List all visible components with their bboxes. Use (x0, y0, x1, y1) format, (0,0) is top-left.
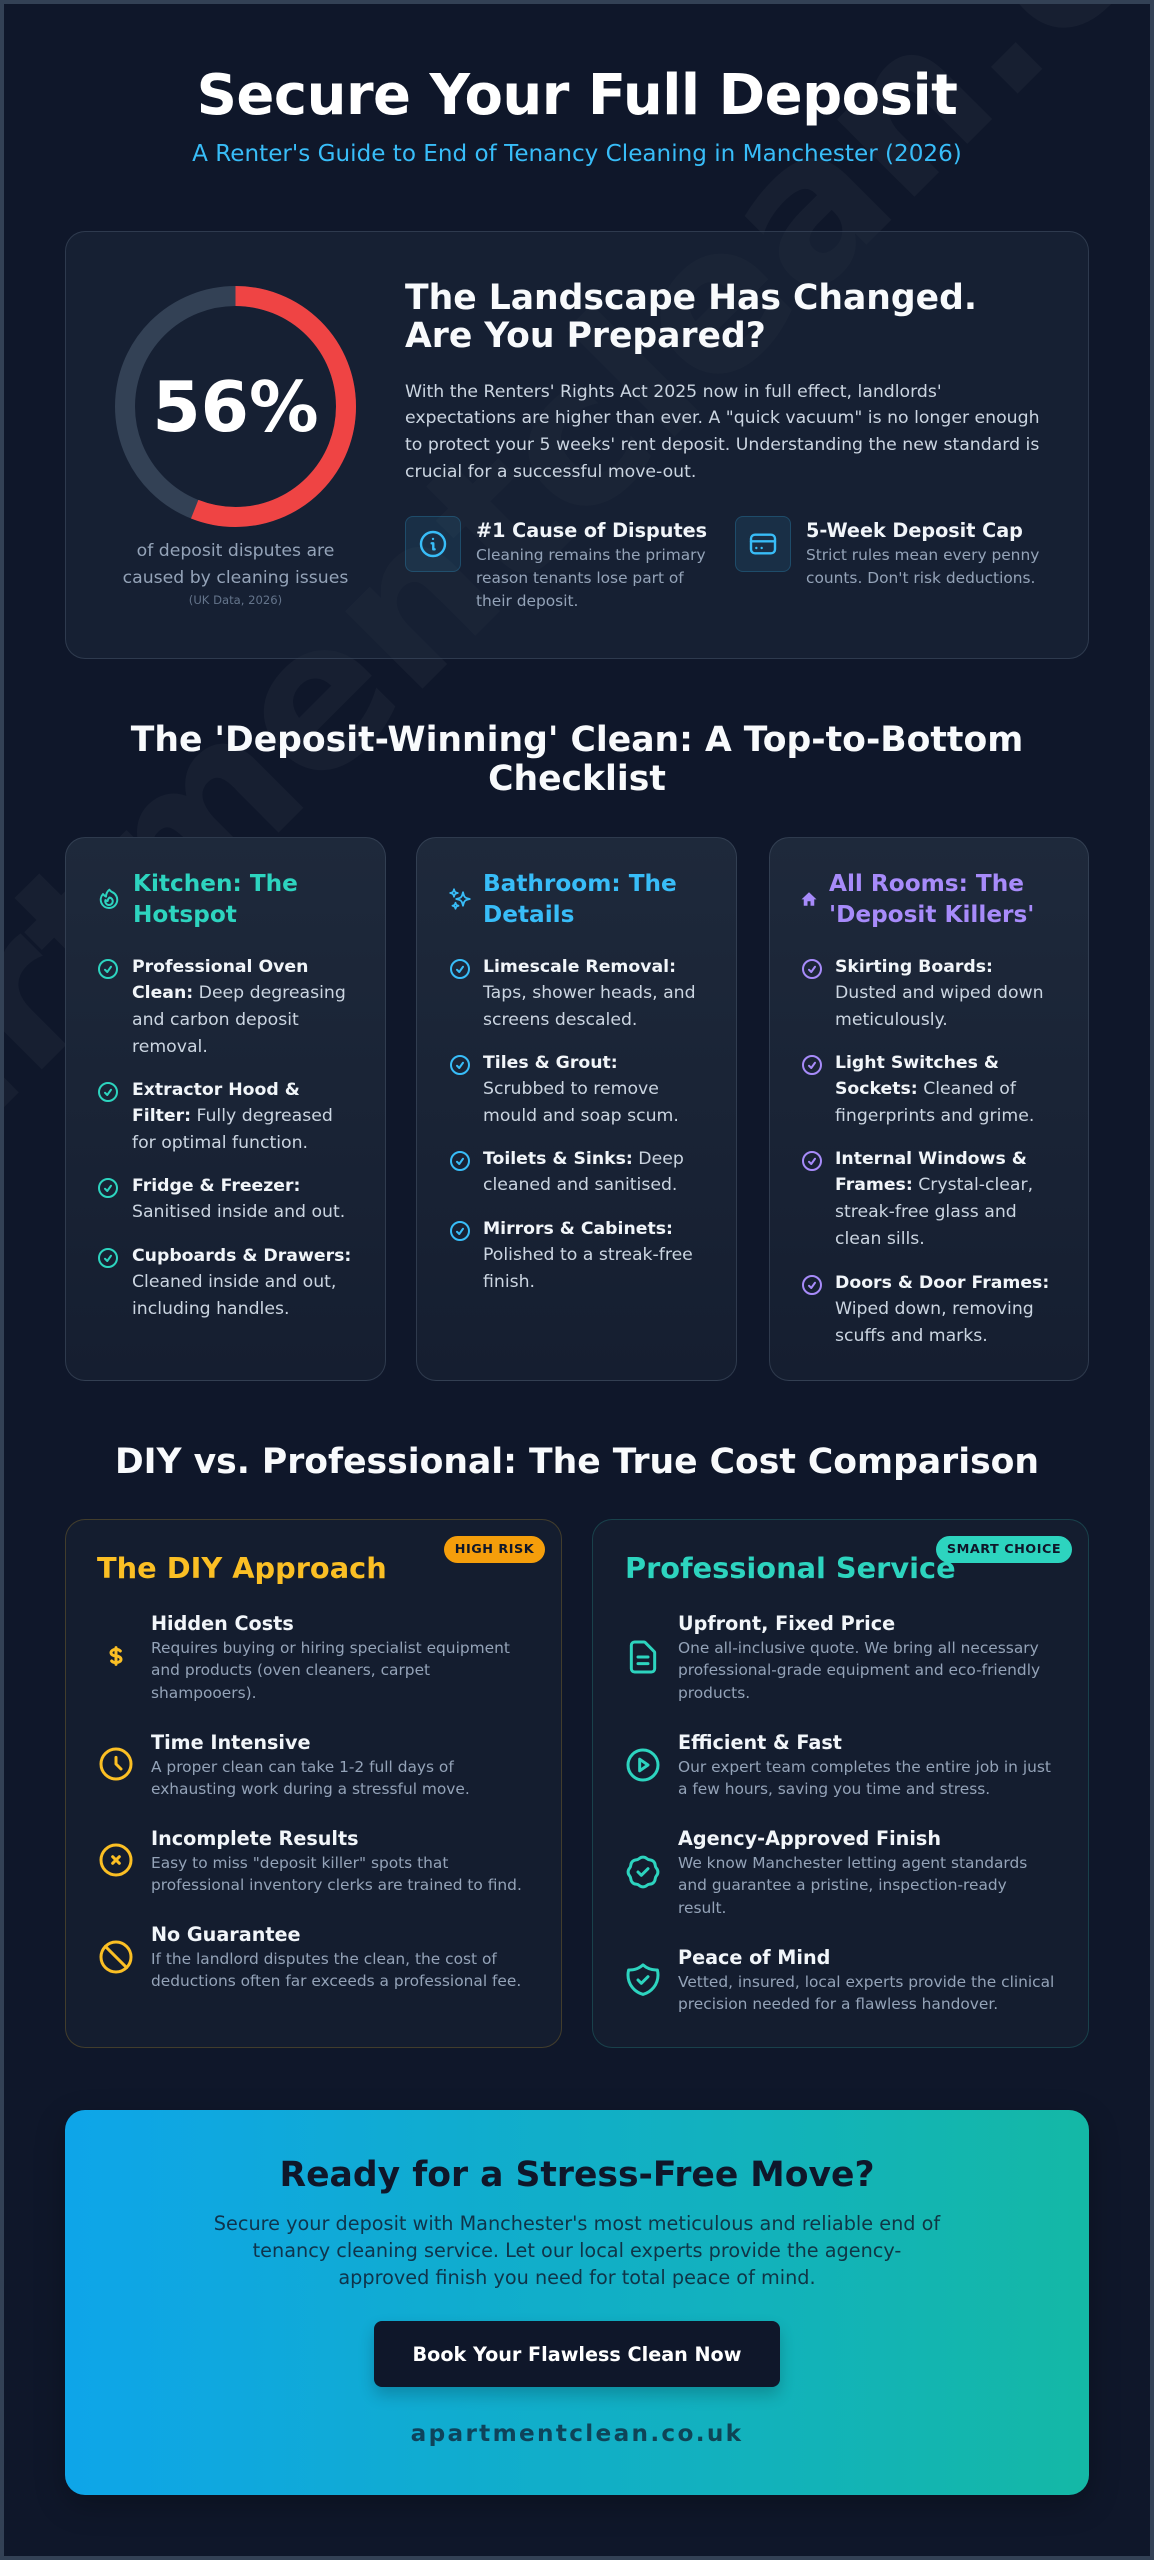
kitchen list: Cleaned inside and out, (132, 1272, 336, 1292)
icon: play (626, 1748, 660, 1782)
CTA paragraph (214, 2212, 940, 2289)
heading: checklist (130, 720, 1023, 798)
fact: 5-week cap (806, 519, 1039, 587)
kitchen list (98, 957, 351, 1319)
item: fixed price: professional-grade equipment and eco-friendly (678, 1661, 1040, 1679)
professional heading: Professional Service (625, 1551, 956, 1585)
item: fixed price: One all-inclusive quote. We bring all necessary (678, 1638, 1039, 1656)
item: hidden costs (151, 1612, 510, 1702)
bathroom list: Polished to a streak-free (483, 1245, 693, 1265)
panel: bathroom (416, 837, 737, 1381)
item: time intensive: exhausting work during a stressful move. (151, 1780, 470, 1798)
heading: landscape: The Landscape Has Changed. (405, 278, 977, 318)
all rooms list: meticulously. (835, 1010, 948, 1030)
item: agency approved: Agency-Approved Finish (678, 1826, 941, 1850)
panel: kitchen (65, 837, 386, 1381)
item: efficient (678, 1730, 1051, 1798)
bathroom list: Scrubbed to remove (483, 1079, 659, 1099)
item: time intensive (151, 1730, 470, 1798)
item: agency approved: result. (678, 1899, 726, 1917)
intro paragraph: expectations are higher than ever. A "quick vacuum" is no longer enough (405, 408, 1040, 428)
kitchen list: Sanitised inside and out. (132, 1202, 345, 1222)
item: efficient: a few hours, saving you time and stress. (678, 1780, 990, 1798)
all rooms list: clean sills. (835, 1229, 925, 1249)
fact: 5-week cap: Strict rules mean every penny (806, 546, 1039, 564)
badge: smart choice (936, 1536, 1072, 1563)
all rooms list: Skirting Boards: (835, 957, 993, 977)
kitchen list: Professional Oven (132, 957, 308, 977)
kitchen list: removal. (132, 1037, 208, 1057)
item: hidden costs: Requires buying or hiring specialist equipment (151, 1638, 510, 1656)
stat caption (123, 541, 348, 588)
icon: document (630, 1640, 656, 1674)
icon: badge check (626, 1856, 660, 1888)
bathroom list: cleaned and sanitised. (483, 1175, 677, 1195)
all rooms list: fingerprints and grime. (835, 1106, 1034, 1126)
kitchen heading: Hotspot (133, 901, 237, 928)
heading: landscape: Are You Prepared? (405, 316, 766, 356)
CTA paragraph: Secure your deposit with Manchester's most meticulous and reliable end of (214, 2212, 940, 2235)
stat: 56%: 56% (152, 367, 319, 448)
item: no guarantee: deductions often far exceeds a professional fee. (151, 1972, 521, 1990)
heading: checklist: The 'Deposit-Winning' Clean: A Top-to-Bottom (131, 720, 1023, 760)
panel: landscape (65, 231, 1089, 659)
item: peace of mind (678, 1946, 1054, 2013)
CTA button: Book Your Flawless Clean Now (413, 2343, 741, 2366)
website url: apartmentclean.co.uk (411, 2420, 743, 2447)
intro paragraph (405, 382, 1040, 482)
intro paragraph: crucial for a successful move-out. (405, 462, 696, 482)
panel: call to action (65, 2110, 1089, 2495)
kitchen list: Fridge & Freezer: (132, 1176, 300, 1196)
icon: x circle (100, 1844, 132, 1876)
item: peace of mind: precision needed for a flawless handover. (678, 1995, 998, 2013)
item: peace of mind: Vetted, insured, local experts provide the clinical (678, 1972, 1054, 1990)
icon: shield (626, 1963, 660, 1996)
badge: smart choice: SMART CHOICE (947, 1542, 1061, 1557)
subtitle: A Renter's Guide to End of Tenancy Cleaning in Manchester (2026) (192, 141, 962, 167)
kitchen list: Cupboards & Drawers: (132, 1246, 351, 1266)
bathroom list: Taps, shower heads, and (483, 983, 696, 1003)
CTA paragraph: tenancy cleaning service. Let our local experts provide the agency- (253, 2239, 901, 2262)
icon: ban (100, 1940, 132, 1974)
stat source: (UK Data, 2026) (189, 592, 282, 606)
CTA paragraph: approved finish you need for total peace of mind. (338, 2266, 816, 2289)
CTA heading: Ready for a Stress-Free Move? (279, 2155, 875, 2195)
fact: #1 cause: reason tenants lose part of (476, 569, 684, 587)
item: no guarantee: No Guarantee (151, 1922, 301, 1946)
item: incomplete results: professional inventory clerks are trained to find. (151, 1876, 522, 1894)
bathroom list: finish. (483, 1272, 535, 1292)
item: efficient: Efficient & Fast (678, 1730, 842, 1754)
all rooms list: scuffs and marks. (835, 1326, 988, 1346)
kitchen list: Extractor Hood & (132, 1080, 300, 1100)
icon: home (802, 892, 816, 906)
all rooms list: Light Switches & (835, 1053, 999, 1073)
all rooms list: streak-free glass and (835, 1202, 1017, 1222)
bathroom heading: Bathroom: The (483, 870, 677, 897)
badge: high risk (444, 1536, 545, 1563)
fact: #1 cause: #1 Cause of Disputes (476, 519, 707, 542)
all rooms heading: All Rooms: The (829, 870, 1024, 897)
kitchen list: Filter: Fully degreased (132, 1106, 333, 1126)
donut chart: 56% (115, 286, 356, 527)
stat caption: caused by cleaning issues (123, 568, 348, 588)
heading: checklist: Checklist (488, 758, 666, 798)
DIY heading: The DIY Approach (97, 1551, 387, 1585)
item: fixed price (678, 1612, 1040, 1702)
title: Secure Your Full Deposit (197, 63, 957, 128)
icon: sparkles (449, 888, 471, 910)
bathroom list: mould and soap scum. (483, 1106, 679, 1126)
kitchen heading (133, 870, 298, 928)
all rooms list: Internal Windows & (835, 1149, 1027, 1169)
fact: 5-week cap: counts. Don't risk deductions. (806, 569, 1035, 587)
kitchen list: including handles. (132, 1299, 289, 1319)
item: no guarantee (151, 1922, 521, 1990)
item: efficient: Our expert team completes the entire job in just (678, 1758, 1051, 1776)
item: agency approved: and guarantee a pristine, inspection-ready (678, 1876, 1007, 1894)
item: incomplete results: Incomplete Results (151, 1826, 359, 1850)
item: hidden costs: shampooers). (151, 1684, 257, 1702)
item: agency approved: We know Manchester letting agent standards (678, 1854, 1027, 1872)
bathroom list: Mirrors & Cabinets: (483, 1219, 673, 1239)
bathroom list (450, 957, 696, 1292)
bathroom list: screens descaled. (483, 1010, 637, 1030)
fact: #1 cause (476, 519, 707, 610)
icon: card (735, 516, 791, 572)
icon: info (405, 516, 461, 572)
item: agency approved (678, 1826, 1027, 1917)
stat caption: of deposit disputes are (137, 541, 334, 561)
all rooms heading (829, 870, 1034, 928)
fact: 5-week cap: 5-Week Deposit Cap (806, 519, 1023, 542)
intro paragraph: to protect your 5 weeks' rent deposit. Understanding the new standard is (405, 435, 1039, 455)
all rooms list: Sockets: Cleaned of (835, 1079, 1016, 1099)
item: time intensive: A proper clean can take 1-2 full days of (151, 1758, 454, 1776)
kitchen list: and carbon deposit (132, 1010, 299, 1030)
panel: DIY (65, 1519, 562, 2048)
fact: #1 cause: Cleaning remains the primary (476, 546, 706, 564)
all rooms list: Frames: Crystal-clear, (835, 1175, 1033, 1195)
all rooms list: Dusted and wiped down (835, 983, 1044, 1003)
bathroom heading (483, 870, 677, 928)
item: incomplete results (151, 1826, 522, 1894)
item: hidden costs: Hidden Costs (151, 1612, 294, 1634)
all rooms list: Wiped down, removing (835, 1299, 1034, 1319)
item: fixed price: Upfront, Fixed Price (678, 1612, 895, 1634)
bathroom list: Toilets & Sinks: Deep (483, 1149, 684, 1169)
item: incomplete results: Easy to miss "deposit killer" spots that (151, 1854, 448, 1872)
bathroom heading: Details (483, 901, 574, 928)
bathroom list: Tiles & Grout: (483, 1053, 618, 1073)
kitchen heading: Kitchen: The (133, 870, 298, 897)
fact: #1 cause: their deposit. (476, 592, 578, 610)
panel: professional (592, 1519, 1089, 2048)
icon: flame (100, 888, 118, 909)
heading: comparison: DIY vs. Professional: The True Cost Comparison (115, 1442, 1039, 1482)
all rooms heading: 'Deposit Killers' (829, 901, 1034, 928)
intro paragraph: With the Renters' Rights Act 2025 now in full effect, landlords' (405, 382, 942, 402)
CTA button (374, 2321, 780, 2387)
item: hidden costs: and products (oven cleaners, carpet (151, 1661, 430, 1679)
all rooms list (802, 957, 1049, 1346)
item: fixed price: products. (678, 1684, 750, 1702)
kitchen list: for optimal function. (132, 1133, 308, 1153)
icon: dollar (110, 1646, 122, 1666)
icon: clock (100, 1748, 132, 1780)
item: time intensive: Time Intensive (151, 1730, 311, 1754)
panel: all rooms (769, 837, 1089, 1381)
heading: landscape (405, 278, 977, 356)
item: no guarantee: If the landlord disputes the clean, the cost of (151, 1950, 497, 1968)
badge: high risk: HIGH RISK (455, 1542, 534, 1557)
all rooms list: Doors & Door Frames: (835, 1273, 1049, 1293)
item: peace of mind: Peace of Mind (678, 1946, 830, 1968)
kitchen list: Clean: Deep degreasing (132, 983, 346, 1003)
bathroom list: Limescale Removal: (483, 957, 676, 977)
